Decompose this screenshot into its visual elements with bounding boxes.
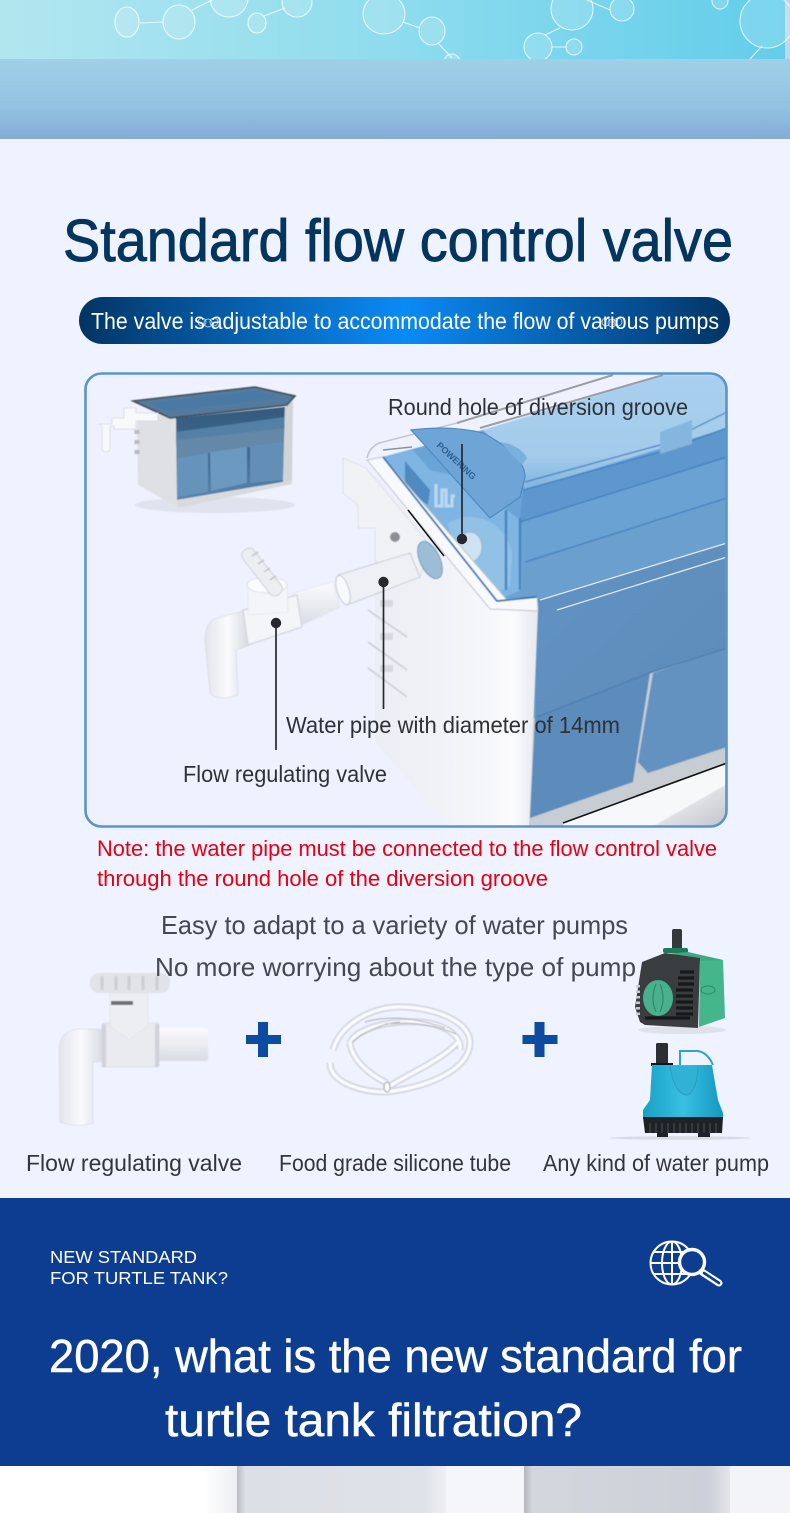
icon: globe and magnifier <box>650 1242 719 1284</box>
main question: turtle tank filtration? <box>165 1394 582 1446</box>
small heading: FOR TURTLE TANK? <box>50 1268 228 1288</box>
icon: flow regulating valve large <box>59 973 208 1125</box>
panel: new standard banner <box>0 1198 790 1466</box>
leader: round hole of diversion groove <box>457 444 467 544</box>
icon: plus 2 <box>522 1022 558 1057</box>
icon: plus 1 <box>246 1022 281 1057</box>
bottom product crop <box>0 1466 790 1513</box>
lid flap <box>411 428 527 518</box>
leader: water pipe <box>378 577 389 709</box>
flow regulating valve in panel <box>205 546 340 698</box>
label: round hole: Round hole of diversion groove <box>388 394 688 420</box>
icon: silicone tube <box>330 1007 470 1092</box>
small heading: NEW STANDARD <box>50 1247 197 1267</box>
icon: green water pump <box>635 929 726 1034</box>
label: flow valve: Flow regulating valve <box>183 761 387 787</box>
rim lines <box>540 543 727 610</box>
small tank thumbnail <box>98 387 295 513</box>
red note: Note: the water pipe must be connected to the flow control valve <box>97 836 717 861</box>
red note: through the round hole of the diversion groove <box>97 866 548 891</box>
top banner with water molecules <box>0 0 790 139</box>
tank interior blue <box>383 375 727 830</box>
small heading <box>50 1247 228 1288</box>
caption: food grade silicone tube: Food grade silicone tube <box>279 1150 511 1176</box>
text: no more worrying: No more worrying about the type of pump <box>155 952 636 982</box>
leader: flow regulating valve <box>271 618 281 750</box>
title: Standard flow control valve <box>63 208 733 274</box>
red note <box>97 836 717 891</box>
label: water pipe: Water pipe with diameter of 14mm <box>286 712 620 738</box>
main question: 2020, what is the new standard for <box>49 1330 742 1382</box>
icon: blue water pump <box>610 1043 750 1140</box>
main question <box>49 1330 742 1446</box>
transparent connector tube <box>333 553 420 606</box>
subtitle pill: The valve is adjustable to accommodate the flow of various pumps <box>91 308 719 334</box>
text: easy to adapt: Easy to adapt to a variety of water pumps <box>161 910 628 940</box>
panel border <box>86 374 726 826</box>
caption: any kind of water pump: Any kind of water pump <box>543 1150 769 1176</box>
caption: flow regulating valve: Flow regulating valve <box>26 1150 242 1176</box>
white tank body <box>343 457 538 826</box>
lid flap: POWERING <box>435 440 478 482</box>
panel: product detail <box>85 373 727 830</box>
subtitle pill <box>79 297 730 344</box>
storage boxes <box>529 648 727 830</box>
